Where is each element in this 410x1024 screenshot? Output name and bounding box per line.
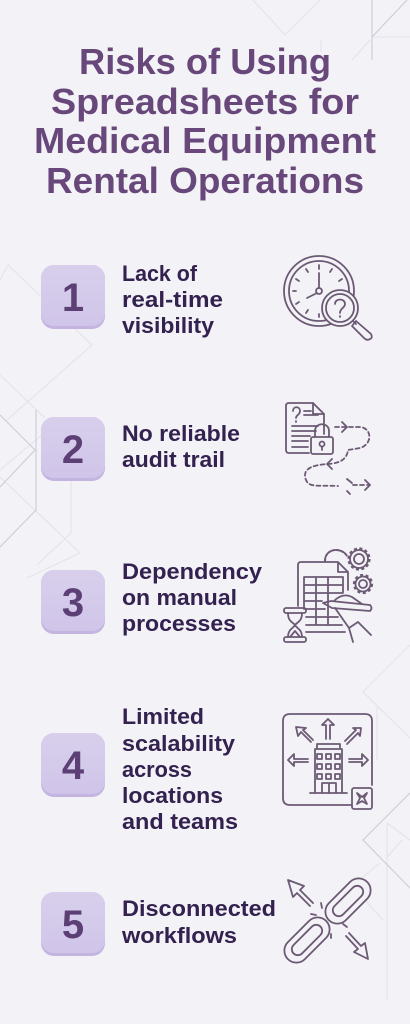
number badge 5: [41, 892, 105, 956]
number badge 3: [41, 570, 105, 634]
panel: risk 1: [41, 256, 372, 340]
panel: risk 4: [41, 704, 372, 834]
number badge 3: 3: [62, 581, 84, 625]
title: Risks of Using: [79, 41, 331, 82]
text: limited scalability across locations and teams: scalability: [122, 731, 236, 756]
text: dependency on manual processes: processes: [122, 611, 236, 636]
title: [34, 41, 376, 201]
text: limited scalability across locations and teams: Limited: [122, 704, 204, 729]
text: no reliable audit trail: audit trail: [122, 447, 225, 472]
text: disconnected workflows: [121, 896, 276, 948]
number badge 2: 2: [62, 428, 84, 472]
text: lack of real-time visibility: visibility: [122, 313, 214, 338]
text: dependency on manual processes: on manual: [122, 585, 237, 610]
text: lack of real-time visibility: real-time: [122, 287, 223, 312]
panel: risk 2: [41, 403, 370, 494]
text: lack of real-time visibility: [122, 261, 223, 338]
text: dependency on manual processes: [122, 559, 263, 636]
number badge 5: 5: [62, 903, 84, 947]
title: Rental Operations: [46, 160, 364, 201]
text: no reliable audit trail: No reliable: [122, 421, 240, 446]
icon: locked document with dashed trail: [286, 403, 370, 494]
number badge 1: [41, 265, 105, 329]
title: Spreadsheets for: [51, 81, 359, 122]
icon: spreadsheet, gears, hourglass and hand: [284, 548, 372, 642]
icon: building with outward arrows: [283, 714, 372, 809]
number badge 4: 4: [62, 744, 85, 788]
text: no reliable audit trail: [122, 421, 240, 472]
icon: broken chain with arrows: [279, 873, 376, 968]
title: Medical Equipment: [34, 120, 376, 161]
icon: clock with magnifier: [284, 256, 372, 340]
text: disconnected workflows: workflows: [121, 923, 237, 948]
text: disconnected workflows: Disconnected: [122, 896, 276, 921]
text: limited scalability across locations and teams: and teams: [122, 809, 238, 834]
number badge 4: [41, 733, 105, 797]
number badge 2: [41, 417, 105, 481]
text: limited scalability across locations and teams: [122, 704, 238, 834]
panel: risk 3: [41, 548, 372, 642]
text: limited scalability across locations and teams: locations: [122, 783, 223, 808]
text: dependency on manual processes: Dependency: [122, 559, 263, 584]
panel: risk 5: [41, 873, 376, 968]
text: lack of real-time visibility: Lack of: [122, 261, 197, 286]
number badge 1: 1: [62, 276, 84, 320]
text: limited scalability across locations and teams: across: [122, 757, 192, 782]
